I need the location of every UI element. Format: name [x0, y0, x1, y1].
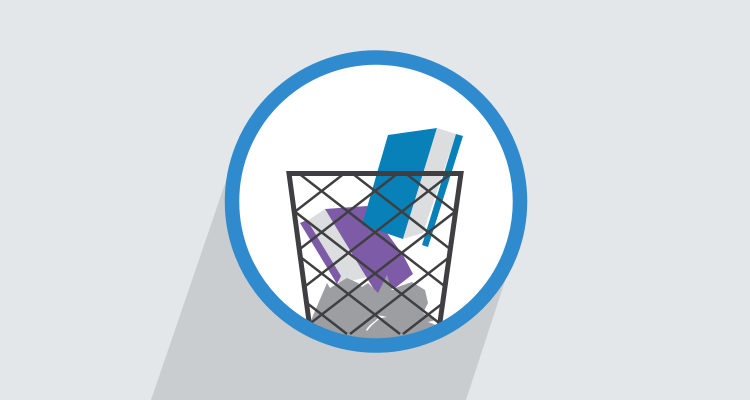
blue book: [362, 128, 463, 247]
long drop shadow: [151, 172, 506, 400]
purple book: [300, 206, 413, 296]
illustration: book and paper in a wastebasket: [151, 50, 528, 400]
crumpled paper: [312, 275, 436, 338]
blue ring: [232, 58, 520, 346]
basket frame: [289, 174, 461, 336]
wastebasket contents: [286, 128, 464, 338]
basket mesh: [296, 176, 454, 335]
white circle: [236, 61, 516, 341]
